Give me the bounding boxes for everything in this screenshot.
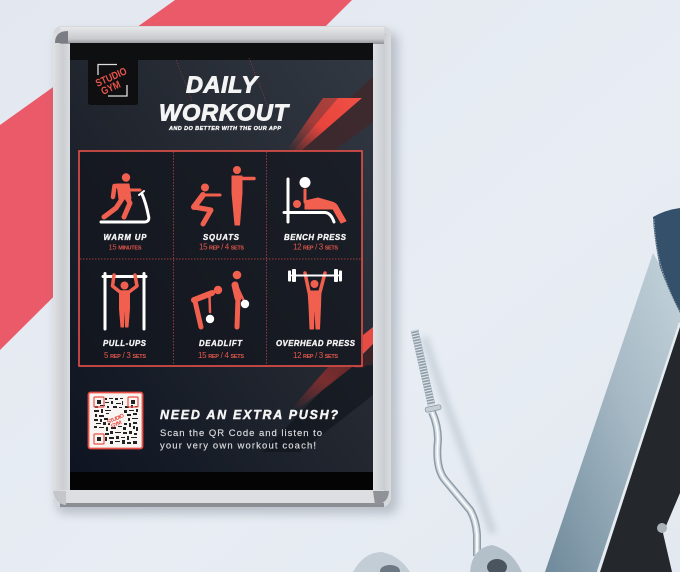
poster frame shadow bbox=[56, 32, 398, 514]
icon: treadmill runner bbox=[101, 173, 149, 222]
label: DEADLIFT bbox=[199, 339, 243, 348]
callout text: your very own workout coach! bbox=[160, 440, 316, 452]
title bbox=[159, 72, 290, 126]
subtitle: AND DO BETTER WITH THE OUR APP bbox=[168, 126, 281, 132]
bottom black band bbox=[70, 472, 373, 490]
label: OVERHEAD PRESS bbox=[276, 339, 356, 348]
exercise machine bbox=[545, 208, 680, 572]
QR code: GYM bbox=[110, 420, 123, 430]
cell: bench press bbox=[284, 177, 347, 252]
cell: pull-ups bbox=[103, 274, 147, 360]
callout text: Scan the QR Code and listen to bbox=[160, 428, 322, 439]
label: BENCH PRESS bbox=[284, 233, 347, 242]
title: WORKOUT bbox=[159, 100, 290, 126]
QR code bbox=[88, 392, 142, 448]
cell: squats bbox=[194, 166, 254, 252]
top black band bbox=[70, 43, 373, 60]
icon: overhead press bbox=[288, 269, 342, 329]
sub-label: 12 REP / 3 SETS bbox=[293, 242, 338, 252]
pink diagonal band bbox=[0, 0, 352, 350]
sub-label: 15 MINUTES bbox=[108, 242, 142, 252]
barbell shadow bbox=[424, 337, 493, 533]
callout heading: NEED AN EXTRA PUSH? bbox=[160, 408, 338, 422]
icon: pull-up figure bbox=[103, 274, 146, 329]
workout grid bbox=[79, 151, 362, 366]
QR code: STUDIO bbox=[106, 413, 126, 426]
title: DAILY bbox=[186, 72, 259, 98]
decorative red stripes upper right bbox=[287, 77, 373, 152]
poster bbox=[70, 43, 373, 490]
cell: deadlift bbox=[194, 271, 249, 360]
decorative stripes lower right bbox=[262, 327, 373, 452]
callout text bbox=[160, 428, 322, 452]
icon: deadlift figures bbox=[194, 271, 249, 327]
cell: overhead press bbox=[276, 269, 356, 360]
logo bbox=[88, 60, 138, 105]
logo: GYM bbox=[99, 79, 123, 98]
label: WARM UP bbox=[104, 233, 147, 242]
barbell bbox=[353, 330, 522, 572]
sub-label: 5 REP / 3 SETS bbox=[104, 351, 146, 360]
sub-label: 15 REP / 4 SETS bbox=[198, 351, 244, 360]
cell: warm up bbox=[101, 173, 149, 252]
logo: STUDIO bbox=[94, 65, 129, 90]
sub-label: 12 REP / 3 SETS bbox=[293, 351, 338, 360]
icon: squat figures bbox=[194, 166, 254, 225]
label: PULL-UPS bbox=[103, 339, 147, 348]
sub-label: 15 REP / 4 SETS bbox=[199, 242, 244, 252]
icon: bench press bbox=[284, 177, 346, 223]
poster frame bbox=[53, 26, 391, 507]
label: SQUATS bbox=[203, 233, 240, 242]
